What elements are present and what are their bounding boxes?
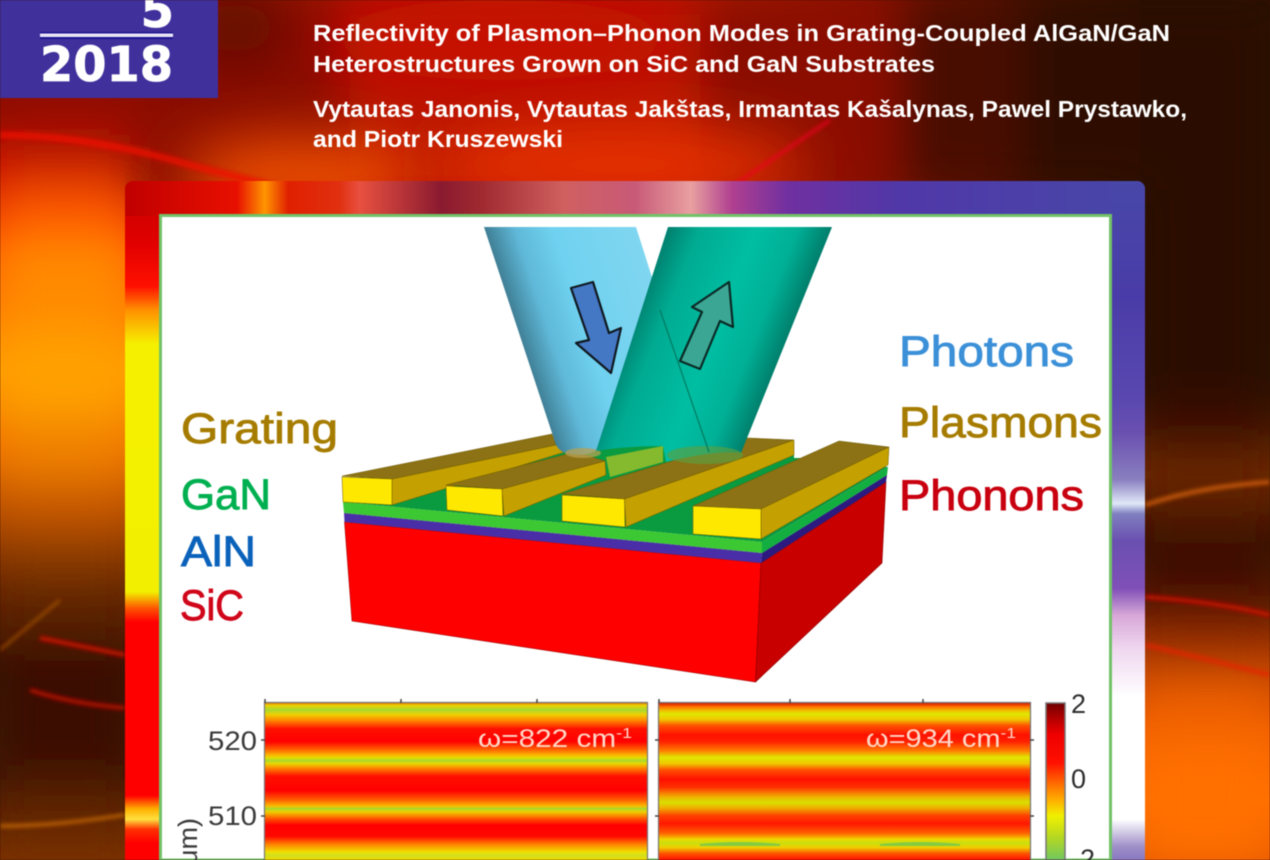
- label: Phonons: Phonons: [899, 472, 1084, 520]
- label: SiC: SiC: [180, 582, 244, 630]
- label: Photons: Photons: [899, 328, 1074, 376]
- layer: GaN: [343, 440, 888, 553]
- label: AlN: AlN: [181, 528, 256, 576]
- plot annotation: -1: [1001, 725, 1016, 742]
- label: Grating: Grating: [181, 405, 338, 453]
- issue number box: [0, 0, 218, 98]
- label: Plasmons: Plasmons: [899, 399, 1102, 447]
- article title: Reflectivity of Plasmon–Phonon Modes in Grating-Coupled AlGaN/GaN: [313, 20, 1170, 46]
- colour scale legend: [1046, 689, 1095, 860]
- article title: [313, 20, 1170, 77]
- article authors: and Piotr Kruszewski: [313, 126, 563, 152]
- axis value 510: 510: [208, 801, 257, 831]
- panel: coloured figure frame: [125, 181, 1145, 860]
- axis ticks: [655, 699, 1034, 816]
- article authors: Vytautas Janonis, Vytautas Jakštas, Irmantas Kašalynas, Pawel Prystawko,: [313, 96, 1187, 122]
- layer: AlN: [344, 475, 887, 563]
- plot annotation: ω=934 cm: [866, 725, 982, 753]
- arrow: incident beam direction: [571, 282, 621, 373]
- axis ticks: [261, 699, 537, 816]
- scale value 0: 0: [1071, 764, 1086, 794]
- panel: white figure area: [160, 216, 1110, 860]
- plot annotation: -1: [616, 725, 632, 742]
- chart: map at 822 cm-1: [173, 699, 648, 860]
- grating bar 1: [342, 434, 565, 505]
- substrate: SiC front face: [344, 522, 761, 682]
- beam: incident photons: [484, 227, 672, 458]
- illustration: grating device: [342, 434, 889, 682]
- article title: Heterostructures Grown on SiC and GaN Substrates: [313, 51, 935, 77]
- grating bar 2: [446, 452, 606, 516]
- plot annotation: ω=822 cm: [478, 725, 594, 753]
- beam footprint on the surface: [606, 446, 663, 477]
- grating bar 3: [562, 438, 794, 527]
- arrow: reflected beam direction: [680, 282, 733, 369]
- label: GaN: GaN: [181, 471, 271, 519]
- grating bar 4: [693, 441, 889, 539]
- article authors: [313, 96, 1187, 152]
- issue number box: 2018: [40, 37, 173, 93]
- substrate: SiC side face: [756, 482, 886, 682]
- chart: map at 934 cm-1: [655, 699, 1034, 860]
- beam: reflected photons: [596, 227, 832, 464]
- axis value 520: 520: [208, 726, 257, 756]
- scale value 2: 2: [1071, 689, 1086, 719]
